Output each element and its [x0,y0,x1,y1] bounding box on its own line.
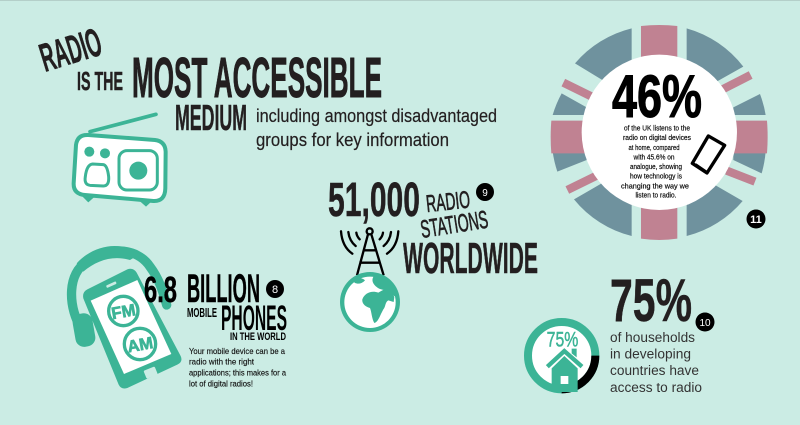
text: subheading: groups for key information [256,130,449,150]
text: digital listening description: at home, compared [628,145,680,152]
badge: 10 [696,312,714,332]
badge: 9 [476,183,494,201]
icon: globe [340,272,400,332]
stat: 46%: 46% [612,63,702,130]
text: WORLDWIDE [403,234,538,283]
text: subheading: including amongst disadvantaged [256,106,497,126]
badge: 10: 10 [699,318,711,329]
icon: house donut [528,322,595,392]
icon: radio tower [341,228,398,275]
text: phone description: lot of digital radios! [189,378,253,388]
text: households description: countries have [610,363,699,378]
panel: radio stations [328,174,538,332]
text: phone description [189,346,286,388]
panel: households [528,267,714,395]
stat: 6.8 billion [144,267,260,311]
icon: phone with headphones: AM [126,333,155,356]
text: digital listening description: analogue, showing [630,164,682,171]
stat: 6.8 billion: 6.8 [144,269,177,310]
text: subheading [256,106,497,150]
text: households description: in developing [610,346,691,362]
stat: 75%: 75% [610,267,692,334]
text: phone description: applications; this makes for a [189,368,286,378]
badge: 9: 9 [482,188,488,199]
text: digital listening description: of the UK listens to the [624,126,690,132]
badge: 11: 11 [750,214,762,226]
icon: phone with headphones [71,246,181,389]
stat: 51,000: 51,000 [328,174,420,227]
panel: headline [35,20,497,150]
text: digital listening description: radio on digital devices [623,135,691,142]
panel: mobile phones [71,246,287,389]
text: phone description: Your mobile device can be a [189,346,285,356]
chart: union flag ring [551,25,768,240]
heading: radio stations: STATIONS [419,206,490,244]
badge: 8: 8 [272,284,278,296]
text: digital listening description: listen to radio. [636,192,677,200]
heading: radio stations [419,187,490,244]
icon: radio [74,114,166,205]
heading: mobile phones in the world: MOBILE [187,305,217,320]
text: phone description: radio with the right [189,356,255,366]
heading: radio: RADIO [35,20,107,81]
badge: 8 [266,280,284,298]
text: households description: access to radio [610,380,702,395]
heading: mobile phones in the world [187,299,287,343]
text: digital listening description: changing the way we [621,184,689,190]
text: digital listening description: how technology is [630,174,682,180]
text: digital listening description: with 45.6% on [633,154,675,162]
heading: radio stations: RADIO [425,187,471,218]
text: households description [610,330,702,395]
icon: smartphone [692,136,725,174]
text: digital listening description [621,126,691,200]
icon: phone with headphones: FM [110,300,137,323]
badge: 11 [746,210,766,228]
heading: mobile phones in the world: IN THE WORLD [230,331,286,343]
heading: is the: IS THE [77,66,123,96]
panel: mobile phones: BILLION [187,267,260,311]
text: households description: of households [610,330,695,345]
icon: house donut: 75% [547,327,578,352]
panel: headline: MEDIUM [175,97,247,138]
panel: UK digital listening [551,25,768,240]
panel: headline: MOST ACCESSIBLE [132,46,382,110]
text: PHONES [221,299,287,338]
